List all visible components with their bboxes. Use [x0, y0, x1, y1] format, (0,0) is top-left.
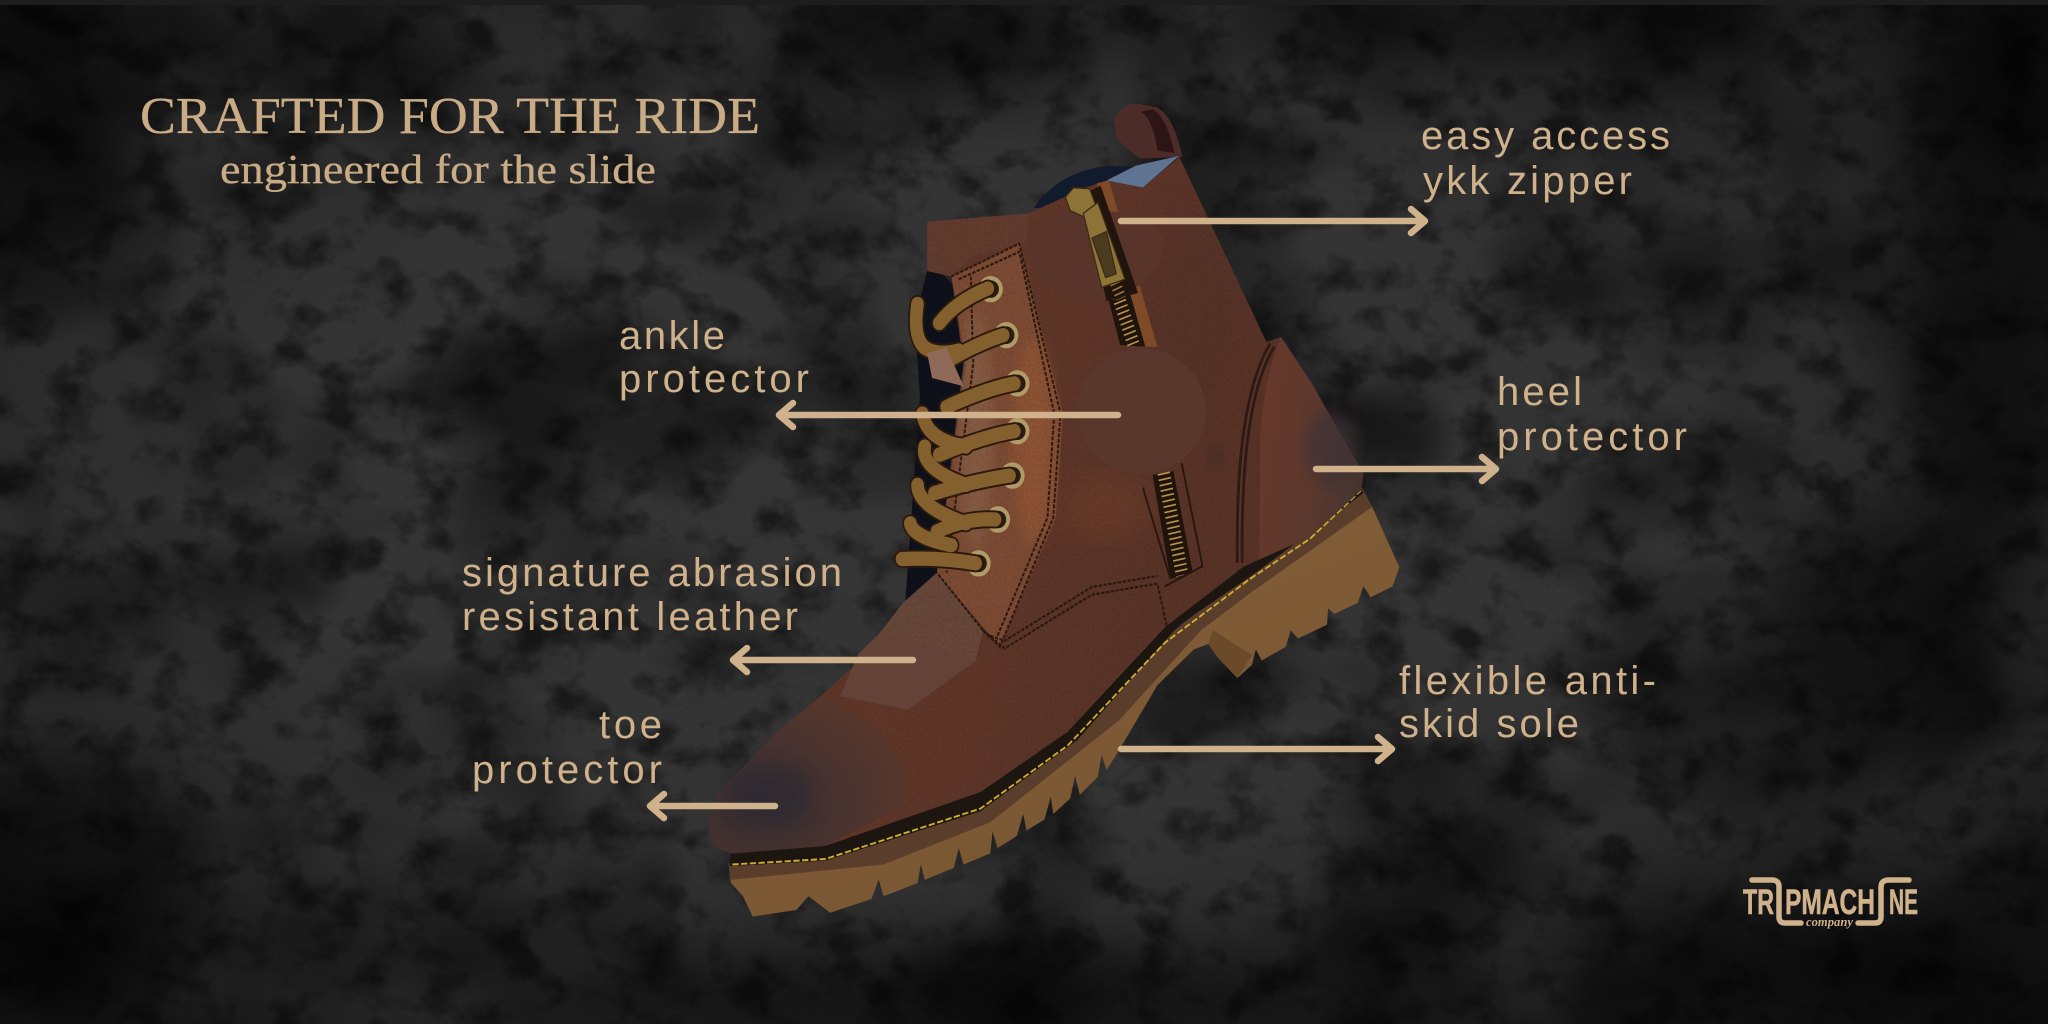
- inner lining: [1034, 156, 1179, 211]
- label: easy access ykk zipper: easy access: [1421, 114, 1670, 158]
- lace keeper loop: [927, 348, 964, 386]
- label: ankle protector: [619, 314, 809, 401]
- label: easy access ykk zipper: ykk zipper: [1423, 159, 1632, 203]
- arrow: ankle: [779, 403, 1118, 427]
- arrow: sole: [1121, 737, 1392, 761]
- heel lugs shading: [1208, 630, 1252, 678]
- label: toe protector: protector: [472, 748, 662, 792]
- label: toe protector: [472, 703, 662, 792]
- bruise mark: [1207, 445, 1224, 470]
- label: ankle protector: ankle: [619, 314, 725, 358]
- arrow: abrasion leather: [733, 648, 913, 672]
- arrow: zipper: [1121, 209, 1425, 233]
- logo tagline: company: [1806, 914, 1853, 929]
- tongue gap: [905, 260, 976, 600]
- label: ankle protector: protector: [619, 357, 809, 401]
- sole: [728, 486, 1399, 917]
- pull tab: [1114, 104, 1182, 159]
- label: flexible anti-skid sole: skid sole: [1399, 702, 1579, 746]
- laces: [902, 289, 1014, 563]
- boot illustration: [709, 104, 1400, 917]
- leather shading: [680, 90, 1440, 950]
- logo: Tripmachine company: [1743, 880, 1918, 929]
- zipper flap patch: [1027, 210, 1165, 299]
- label: easy access ykk zipper: [1421, 114, 1670, 203]
- stitch lines: [937, 244, 1167, 648]
- zipper track over patch: [1082, 186, 1138, 301]
- ankle protector: [1077, 348, 1206, 473]
- upper zipper tape: [1082, 181, 1157, 347]
- toe protector: [709, 696, 909, 854]
- logo wordmark: NE: [1889, 883, 1918, 922]
- eyelets: [968, 278, 1028, 574]
- abrasion resistant patch: [840, 633, 977, 710]
- label: heel protector: heel: [1497, 370, 1582, 414]
- label: signature abrasion resistant leather: [462, 551, 842, 639]
- arrow: toe: [650, 794, 775, 818]
- yellow stitching: [732, 490, 1361, 864]
- subheading: engineered for the slide: [220, 146, 656, 192]
- logo wordmark: PMACH: [1785, 883, 1875, 922]
- label: flexible anti-skid sole: [1399, 659, 1656, 746]
- leather upper: [709, 157, 1363, 854]
- midsole band: [728, 486, 1372, 880]
- label: signature abrasion resistant leather: signature abrasion: [462, 551, 842, 595]
- logo pipes: [1752, 880, 1909, 923]
- zipper puller: [1065, 188, 1125, 287]
- label: heel protector: [1497, 370, 1687, 459]
- heel protector: [1240, 337, 1363, 563]
- label: flexible anti-skid sole: flexible anti-: [1399, 659, 1656, 703]
- label: toe protector: toe: [599, 703, 662, 747]
- label: heel protector: protector: [1497, 415, 1687, 459]
- logo wordmark: TR: [1743, 883, 1774, 922]
- heading: CRAFTED FOR THE RIDE: [140, 88, 760, 145]
- arrow: heel: [1316, 457, 1496, 481]
- welt: [729, 488, 1363, 866]
- lower zipper: [1143, 463, 1203, 586]
- label: signature abrasion resistant leather: resistant leather: [462, 595, 798, 639]
- title block: [140, 88, 760, 192]
